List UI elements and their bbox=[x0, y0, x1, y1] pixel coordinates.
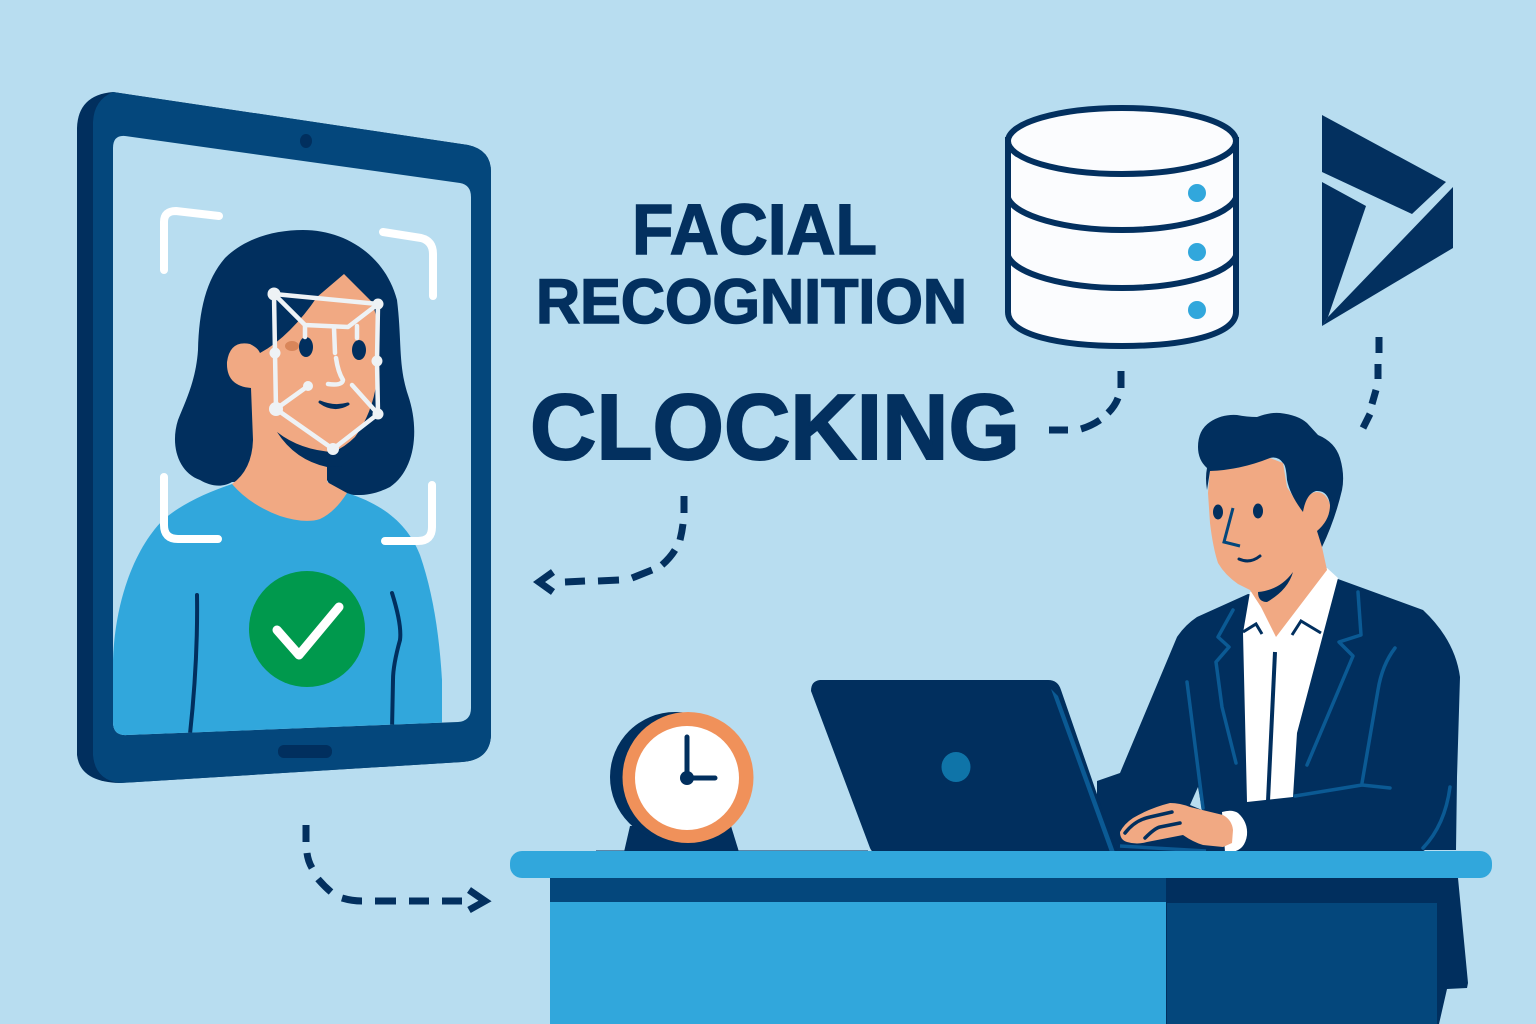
desk right panel bbox=[1167, 903, 1437, 1024]
tablet camera bbox=[300, 134, 312, 148]
laptop lid bbox=[811, 680, 1118, 855]
icon: database bbox=[1008, 108, 1236, 346]
man eyes bbox=[1213, 504, 1263, 520]
cuff bbox=[1222, 811, 1247, 852]
clock hands bbox=[680, 737, 715, 785]
woman face and neck bbox=[227, 274, 379, 521]
laptop logo bbox=[942, 752, 970, 782]
icon: dynamics logo bbox=[1322, 115, 1453, 326]
tablet home button bbox=[278, 745, 332, 758]
clock face bbox=[635, 726, 739, 830]
finger lines bbox=[1125, 812, 1180, 838]
arrow: database to clocking bbox=[1049, 371, 1121, 430]
laptop keyboard base bbox=[1116, 846, 1224, 857]
woman hair bbox=[175, 230, 414, 495]
desk bbox=[550, 878, 1468, 1024]
man shirt bbox=[1243, 568, 1338, 802]
man neck and face bbox=[1208, 458, 1327, 637]
woman shirt bbox=[113, 480, 442, 740]
woman eyes bbox=[299, 337, 366, 360]
woman mouth bbox=[320, 402, 348, 408]
man ear bbox=[1303, 492, 1331, 532]
title line one: FACIAL bbox=[632, 191, 877, 270]
title line two: RECOGNITION bbox=[536, 267, 967, 337]
shelf line bbox=[596, 850, 868, 854]
woman on tablet screen bbox=[113, 211, 442, 740]
laptop side highlight bbox=[1051, 689, 1116, 855]
tablet screen bbox=[113, 136, 471, 735]
title: facial recognition bbox=[536, 191, 967, 337]
clock stand bbox=[624, 826, 739, 852]
tablet device bbox=[77, 92, 491, 783]
man jacket bbox=[1097, 579, 1460, 856]
woman cheek mark bbox=[285, 341, 299, 351]
hand shape bbox=[1120, 803, 1233, 847]
desk right side bbox=[1166, 878, 1468, 1024]
desk front panel bbox=[550, 878, 1166, 1024]
clock rim bbox=[622, 712, 754, 843]
arrow: logo to man bbox=[1363, 337, 1379, 428]
desk top bbox=[510, 851, 1492, 878]
man collar bbox=[1243, 621, 1321, 635]
desk front band bbox=[550, 878, 1166, 902]
arrow: tablet to desk bbox=[306, 825, 485, 910]
woman chin shadow bbox=[277, 432, 332, 467]
arrow: clocking to tablet bbox=[539, 496, 684, 592]
man hand bbox=[1120, 803, 1247, 852]
gap between arm and torso bbox=[1190, 787, 1202, 810]
face recognition mesh bbox=[268, 288, 384, 455]
tablet front face bbox=[93, 92, 491, 783]
man at laptop bbox=[1097, 413, 1460, 856]
tablet body bbox=[77, 92, 491, 783]
man nose bbox=[1224, 508, 1240, 546]
verified check badge bbox=[249, 571, 365, 687]
clock back bbox=[610, 712, 740, 842]
clock bbox=[610, 712, 754, 852]
scan frame corners bbox=[164, 211, 433, 541]
man mouth bbox=[1239, 556, 1260, 561]
man chin shadow bbox=[1258, 572, 1293, 602]
heading: clocking: CLOCKING bbox=[530, 375, 1020, 479]
man hair bbox=[1198, 413, 1343, 547]
laptop bbox=[811, 680, 1224, 857]
jacket seams bbox=[1187, 592, 1450, 848]
